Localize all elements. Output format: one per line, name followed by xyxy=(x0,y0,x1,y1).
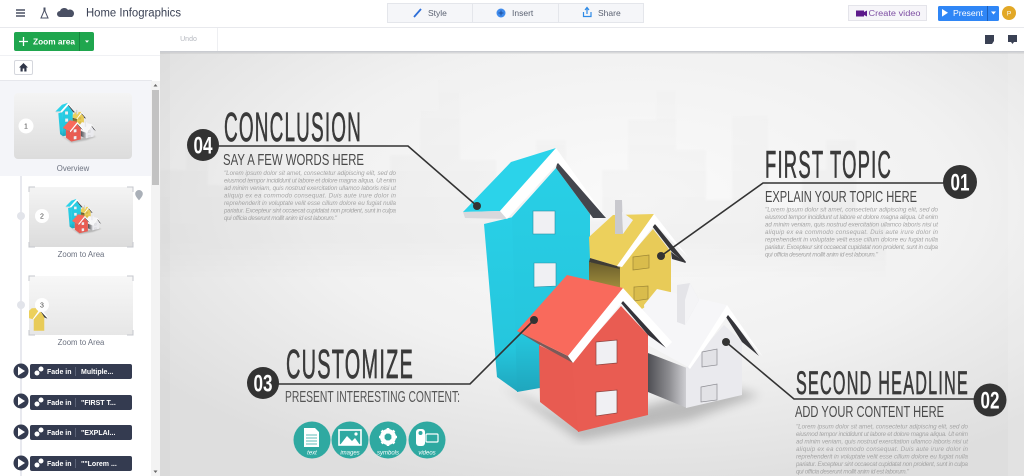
body text 02: eiusmod tempor incididunt ut labore et dolore magna aliqua. Ut enim xyxy=(796,431,968,438)
icon: symbols xyxy=(370,422,406,458)
badge 01: 01 xyxy=(950,170,970,196)
animation step: first topic: "FIRST T... xyxy=(81,400,116,407)
body text 01: reprehenderit in voluptate velit esse cillum dolore eu fugiat nulla xyxy=(765,236,939,244)
sidebar scrollbar xyxy=(151,81,160,476)
zoom area button xyxy=(14,32,94,51)
icon: cloud xyxy=(57,8,74,17)
body text 02 xyxy=(795,424,969,476)
subheading 03: PRESENT INTERESTING CONTENT: xyxy=(285,389,460,406)
houses illustration xyxy=(463,148,763,440)
badge 03: 03 xyxy=(254,370,272,398)
icon: share xyxy=(584,8,591,16)
content type icons xyxy=(294,422,446,458)
zoom slide 2: 2 xyxy=(40,214,44,220)
zoom area button: Zoom area xyxy=(33,38,76,46)
icon: videos: videos xyxy=(418,450,436,456)
user avatar: P xyxy=(1007,10,1011,18)
subheading 02: ADD YOUR CONTENT HERE xyxy=(795,404,944,421)
create video button: Create video xyxy=(868,9,921,18)
topic 03: customize: CUSTOMIZE xyxy=(286,341,414,387)
overview slide item xyxy=(0,81,151,176)
animation step: multiple: Multiple... xyxy=(81,369,113,376)
user avatar xyxy=(1002,6,1016,20)
style insert share tabs: Share xyxy=(598,8,621,18)
animation step: explain xyxy=(14,424,132,440)
badge 02 xyxy=(974,384,1006,416)
animation step: multiple: Fade in xyxy=(47,369,72,376)
body text 01: aliquip ex ea commodo consequat. Duis aute irure dolor in xyxy=(765,229,939,236)
body text 01 xyxy=(764,206,939,258)
icon: flask xyxy=(41,8,48,18)
thumbnail 1 xyxy=(55,103,97,143)
topic 04: conclusion xyxy=(187,104,481,222)
timeline xyxy=(17,176,25,476)
top toolbar xyxy=(0,0,1024,28)
ground shadow xyxy=(500,385,760,440)
body text 01: eiusmod tempor incididunt ut labore et dolore magna aliqua. Ut enim xyxy=(765,214,938,221)
animation step: multiple xyxy=(14,364,132,379)
animation step: explain: Fade in xyxy=(47,430,72,437)
body text 04: ad minim veniam, quis nostrud exercitation ullamco laboris nisi ut xyxy=(224,185,396,192)
topic 02: second headline xyxy=(722,338,1006,476)
house: red xyxy=(517,275,672,432)
body text 02: aliquip ex ea commodo consequat. Duis aute irure dolor in xyxy=(796,446,969,453)
zoom slide 2: Zoom to Area xyxy=(58,250,105,259)
sidebar xyxy=(0,28,160,476)
home button xyxy=(14,60,32,74)
zoom slide 3: Zoom to Area xyxy=(58,338,105,347)
badge 02: 02 xyxy=(980,388,1000,414)
body text 02: qui officia deserunt mollit anim id est laborum." xyxy=(796,468,910,476)
body text 02: reprehenderit in voluptate velit esse cillum dolore eu fugiat nulla xyxy=(796,454,969,460)
icon: insert plus xyxy=(496,8,506,18)
topic 01: first topic: FIRST TOPIC xyxy=(765,144,892,186)
leader line 02 xyxy=(726,342,990,399)
zoom slide 3: 3 xyxy=(40,302,44,310)
present button xyxy=(938,6,999,21)
icon: images xyxy=(332,422,368,458)
icon: notes xyxy=(985,35,994,44)
style insert share tabs: Insert xyxy=(512,8,534,18)
topic 01: first topic xyxy=(657,144,977,260)
body text 02: ad minim veniam, quis nostrud exercitation ullamco laboris nisi ut xyxy=(796,438,968,446)
animation step: lorem: ""Lorem ... xyxy=(81,461,117,468)
topic 03: customize xyxy=(247,316,538,458)
badge 04: 04 xyxy=(194,132,213,160)
body text 01: qui officia deserunt mollit anim id est laborum." xyxy=(765,252,879,258)
style insert share tabs: Style xyxy=(428,8,447,18)
undo label: Undo xyxy=(180,36,197,43)
body text 02: pariatur. Excepteur sint occaecat cupidatat non proident, sunt in culpa xyxy=(795,461,969,468)
body text 04: aliquip ex ea commodo consequat. Duis aute irure dolor in xyxy=(224,192,397,200)
body text 01: "Lorem ipsum dolor sit amet, consectetur adipiscing elit, sed do xyxy=(765,206,939,214)
house: white xyxy=(644,283,763,408)
animation step: explain: "EXPLAI... xyxy=(81,430,115,437)
body text 04: qui officia deserunt mollit anim id est laborum." xyxy=(224,215,338,222)
icon: text xyxy=(294,422,330,458)
icon: text: text xyxy=(307,450,317,456)
animation step: first topic: Fade in xyxy=(47,400,72,407)
subheading 01: EXPLAIN YOUR TOPIC HERE xyxy=(765,189,917,206)
subheading 04: SAY A FEW WORDS HERE xyxy=(223,152,364,169)
body text 01: pariatur. Excepteur sint occaecat cupidatat non proident, sunt in culpa xyxy=(764,244,939,251)
badge 04 xyxy=(187,129,219,161)
animation step: first topic xyxy=(14,394,132,410)
animation step: lorem: Fade in xyxy=(47,461,72,468)
body text 01: ad minim veniam, quis nostrud exercitation ullamco laboris nisi ut xyxy=(765,222,938,228)
house: blue xyxy=(463,148,606,392)
body text 04: pariatur. Excepteur sint occaecat cupidatat non proident, sunt in culpa xyxy=(223,208,397,214)
body text 04 xyxy=(223,170,397,222)
icon: location pin xyxy=(135,190,143,200)
style insert share tabs xyxy=(388,4,644,22)
icon: menu xyxy=(16,10,25,16)
overview slide item: Overview xyxy=(57,164,90,173)
leader line 03 xyxy=(263,320,534,384)
body text 02: "Lorem ipsum dolor sit amet, consectetur adipiscing elit, sed do xyxy=(796,424,969,430)
animation step: lorem xyxy=(14,456,132,471)
badge 03 xyxy=(247,367,279,399)
secondary toolbar xyxy=(160,28,1024,54)
body text 04: reprehenderit in voluptate velit esse cillum dolore eu fugiat nulla xyxy=(224,200,397,207)
body text 04: "Lorem ipsum dolor sit amet, consectetur adipiscing elit, sed do xyxy=(224,170,397,177)
badge 01 xyxy=(943,165,977,199)
city skyline backdrop xyxy=(160,80,886,280)
zoom slide 2 xyxy=(29,187,143,259)
zoom slide 3 xyxy=(27,276,133,347)
icon: symbols: symbols xyxy=(377,450,399,456)
body text 04: eiusmod tempor incididunt ut labore et dolore magna aliqua. Ut enim xyxy=(224,178,396,184)
leader line 04 xyxy=(203,146,477,206)
icon: images: images xyxy=(340,450,360,456)
icon: comments xyxy=(1008,35,1017,44)
icon: wand xyxy=(414,9,421,17)
create video button xyxy=(848,6,926,20)
document title: Home Infographics xyxy=(86,8,181,20)
present button: Present xyxy=(953,9,984,18)
leader line 01 xyxy=(661,183,960,256)
house: yellow xyxy=(589,200,688,310)
canvas background xyxy=(160,52,1024,476)
overview slide item: 1 xyxy=(24,124,28,130)
topic 04: conclusion: CONCLUSION xyxy=(224,104,362,150)
icon: videos xyxy=(408,422,446,458)
